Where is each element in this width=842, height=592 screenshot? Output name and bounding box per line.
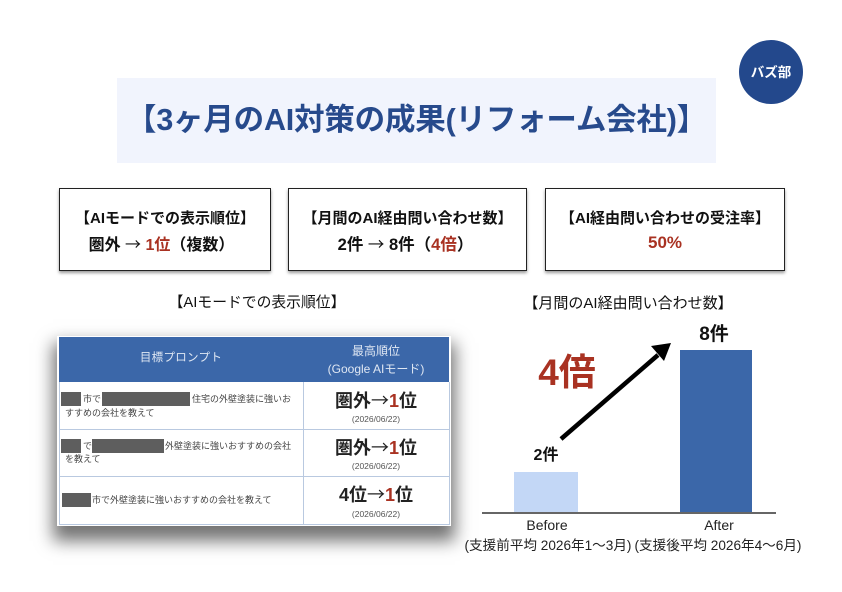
row 1 prompt: すすめの会社を教えて: [65, 408, 155, 418]
row 2 date: (2026/06/22): [352, 461, 400, 471]
row 3 date: (2026/06/22): [352, 509, 400, 519]
bar: before: [514, 472, 578, 513]
panel: monthly inquiries KPI: [288, 188, 527, 271]
row 1 prompt: [61, 392, 291, 418]
panel: monthly inquiries KPI: 2件 → 8件（4倍）: [338, 231, 473, 255]
table header: [59, 337, 449, 382]
panel: monthly inquiries KPI: 【月間のAI経由問い合わせ数】: [302, 210, 512, 227]
heading: chart section: 【月間のAI経由問い合わせ数】: [523, 295, 733, 312]
row 2 prompt: で: [83, 441, 92, 451]
row 3 prompt: 市で外壁塗装に強いおすすめの会社を教えて: [92, 495, 272, 505]
panel: order rate KPI: [545, 188, 785, 271]
axis label: Before: Before: [526, 517, 568, 533]
row 2 rank: 圏外→1位: [335, 434, 417, 460]
axis baseline: [482, 512, 776, 514]
row 1 date: (2026/06/22): [352, 414, 400, 424]
label: 4倍: 4倍: [538, 352, 596, 393]
row 2 prompt: 外壁塗装に強いおすすめの会社: [165, 441, 291, 451]
panel: AI mode rank KPI: 【AIモードでの表示順位】: [75, 210, 255, 227]
title text: 【3ヶ月のAI対策の成果(リフォーム会社)】: [126, 103, 707, 137]
axis note: before period: (支援前平均 2026年1〜3月): [465, 537, 631, 553]
header: top rank: (Google AIモード): [328, 362, 424, 376]
label: 2件: 2件: [534, 446, 558, 464]
arrow: growth: [561, 343, 671, 439]
axis note: after period: (支援後平均 2026年4〜6月): [635, 538, 801, 553]
row 2 prompt: を教えて: [65, 454, 101, 464]
badge: バズ部: バズ部: [751, 65, 791, 80]
row 3 prompt: [62, 493, 272, 507]
row 2 prompt: [61, 439, 291, 464]
row 1 rank: 圏外→1位: [335, 387, 417, 413]
row 1 prompt: 市で: [83, 394, 101, 404]
panel: AI mode rank KPI: 圏外 → 1位（複数）: [89, 231, 234, 255]
bar: after: [680, 350, 752, 513]
panel: order rate KPI: 【AI経由問い合わせの受注率】: [560, 210, 770, 227]
row 3 rank: 4位→1位: [339, 481, 413, 507]
header: prompt: 目標プロンプト: [140, 352, 222, 364]
row 1 prompt: 住宅の外壁塗装に強いお: [192, 394, 291, 404]
title banner: [117, 78, 716, 163]
badge: バズ部: [739, 40, 803, 104]
panel: order rate KPI: 50%: [648, 233, 682, 252]
label: 8件: 8件: [699, 323, 729, 345]
header: top rank: [328, 344, 424, 376]
panel: AI mode rank KPI: [59, 188, 271, 271]
table shadow: [57, 336, 451, 526]
header: top rank: 最高順位: [352, 344, 400, 358]
heading: table section: 【AIモードでの表示順位】: [169, 295, 345, 311]
axis label: After: After: [704, 517, 734, 533]
